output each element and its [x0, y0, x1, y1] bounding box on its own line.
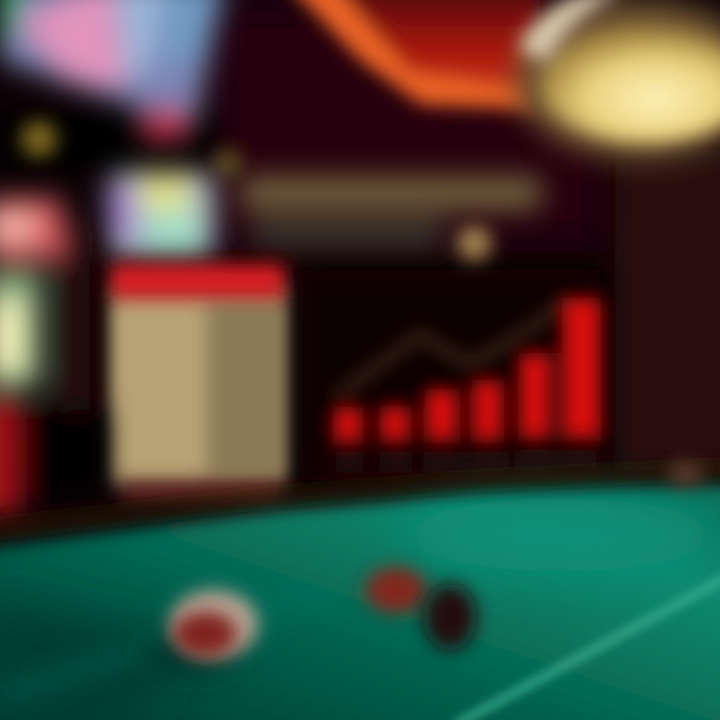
- pool table felt: [0, 468, 720, 720]
- headline, illegible in the reference: [240, 176, 542, 246]
- chandelier: [515, 0, 720, 160]
- chip: red: [365, 567, 427, 613]
- trend line: [335, 300, 570, 398]
- chart: rising red bars with trend line: [333, 298, 601, 474]
- left wall items: [0, 198, 105, 516]
- gold lights: [20, 120, 492, 261]
- bar reflections: [335, 448, 596, 474]
- cabinet: [110, 264, 285, 500]
- small colourful screen: [108, 172, 214, 257]
- chip: red and white: [140, 590, 258, 673]
- distant ball: [668, 463, 704, 485]
- colourful poster: [0, 0, 225, 143]
- chip: dark: [424, 584, 476, 650]
- chips on table: [140, 463, 704, 673]
- ceiling glow: [280, 0, 540, 110]
- red bars: [333, 298, 601, 445]
